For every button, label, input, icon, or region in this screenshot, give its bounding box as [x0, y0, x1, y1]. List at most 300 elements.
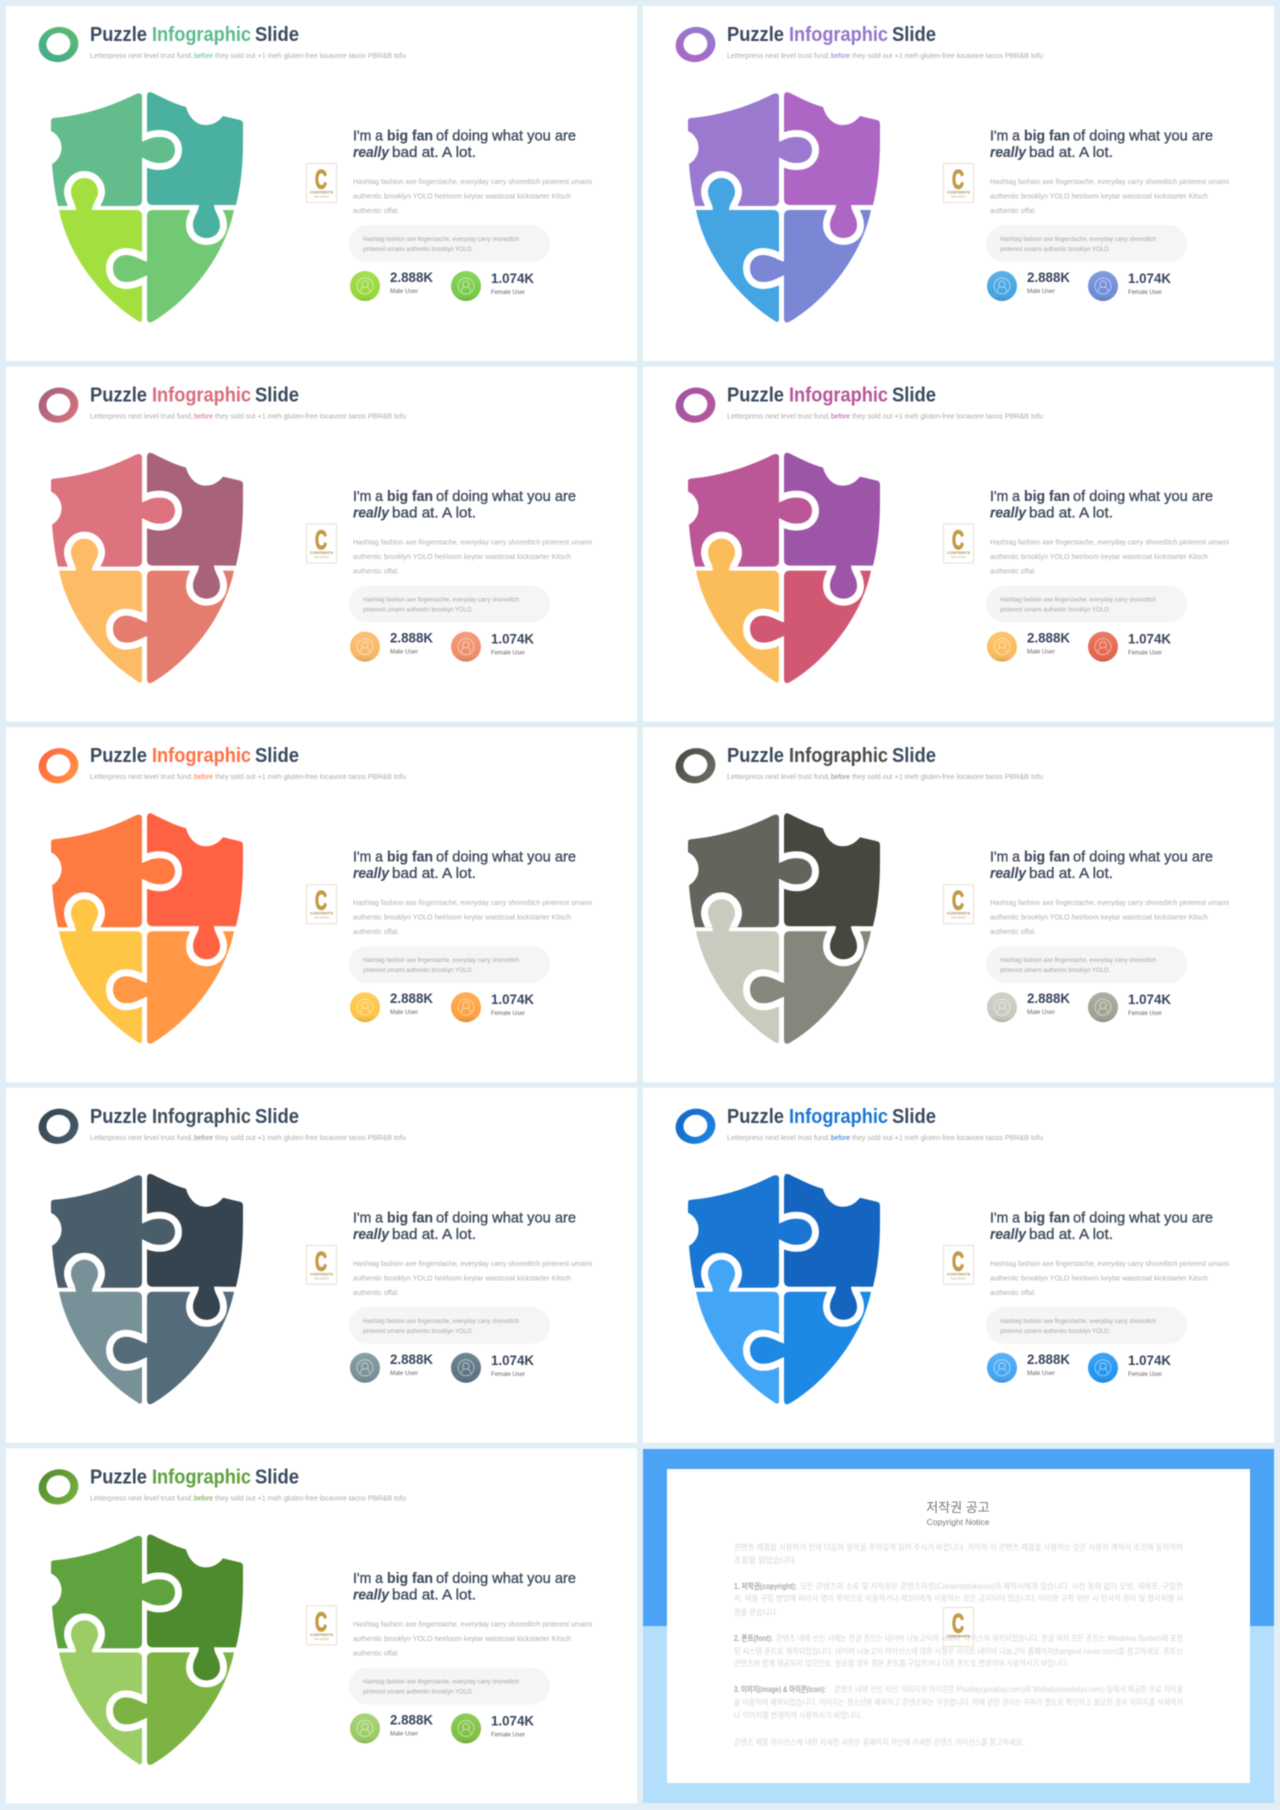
- headline: bad at. A lot.: [392, 144, 476, 161]
- title: Infographic: [152, 24, 251, 46]
- subtitle: Letterpress next level trust fund,: [90, 1133, 193, 1142]
- title: Slide: [892, 745, 936, 767]
- puzzle shield: [688, 1174, 880, 1404]
- subtitle: they sold out +1 meh gluten-free locavore tacos PBR&B tofu: [852, 772, 1043, 781]
- watermark: C: [952, 1246, 964, 1276]
- subtitle: Letterpress next level trust fund,: [90, 1493, 193, 1502]
- watermark: MAIL DESIGN: [951, 555, 966, 559]
- stat: male user: 2.888K: [390, 990, 433, 1006]
- headline: I'm a: [353, 128, 384, 144]
- stat: male user: Male User: [390, 1371, 418, 1377]
- puzzle shield: [51, 453, 243, 683]
- headline: of doing what you are: [1073, 849, 1213, 866]
- title: Infographic: [789, 385, 888, 407]
- watermark: [306, 1606, 336, 1645]
- callout pill: pinterest umami authentic brooklyn YOLO.: [363, 246, 473, 253]
- paragraph: authentic offal.: [990, 1288, 1036, 1297]
- headline: bad at. A lot.: [1029, 505, 1113, 522]
- subtitle: they sold out +1 meh gluten-free locavore tacos PBR&B tofu: [852, 1133, 1043, 1142]
- title: Infographic: [152, 1106, 251, 1128]
- title: Slide: [255, 385, 299, 407]
- watermark: MAIL DESIGN: [314, 1276, 329, 1280]
- paragraph: [990, 177, 1229, 215]
- title: Puzzle: [727, 24, 784, 46]
- callout pill: [349, 1307, 550, 1344]
- puzzle shield: [51, 92, 243, 322]
- icon: ring logo: [672, 384, 719, 426]
- watermark: MAIL DESIGN: [951, 1276, 966, 1280]
- subtitle: [727, 51, 1043, 60]
- stat: female user: Female User: [1128, 1011, 1162, 1017]
- watermark: CONTENTS: [310, 1632, 333, 1637]
- stat: male user: 2.888K: [1027, 269, 1070, 285]
- icon: ring logo: [35, 744, 82, 787]
- headline: [990, 488, 1213, 522]
- copyright body text: 나 이미지를 변경하여 사용하시기 바랍니다.: [734, 1710, 862, 1720]
- subtitle: Letterpress next level trust fund,: [727, 772, 830, 781]
- title: Puzzle: [727, 745, 784, 767]
- copyright body text: 자, 비용 구입 방법에 따라서 영리 목적으로 이용하거나 제3자에게 이용하는 것은 금지되어 있습니다. 이러한 규칙 위반 시 민사적 관리 및 형사처벌 사: [734, 1593, 1184, 1603]
- puzzle shield: [688, 92, 880, 322]
- panel: slide 4 magenta: [643, 367, 1274, 722]
- stat: male user: 2.888K: [390, 1711, 433, 1727]
- paragraph: [990, 538, 1229, 576]
- panel: copyright notice: [643, 1449, 1274, 1803]
- title: [727, 24, 936, 46]
- title: Slide: [892, 385, 936, 407]
- stat: female user: [451, 991, 534, 1022]
- title: [727, 1106, 936, 1128]
- subtitle: Letterpress next level trust fund,: [727, 412, 830, 421]
- subtitle: [727, 772, 1043, 781]
- stat: female user: Female User: [491, 1011, 525, 1017]
- headline: of doing what you are: [436, 488, 576, 505]
- stat: female user: Female User: [1128, 290, 1162, 296]
- headline: of doing what you are: [1073, 488, 1213, 505]
- title: Puzzle: [90, 1466, 147, 1488]
- subtitle: they sold out +1 meh gluten-free locavore tacos PBR&B tofu: [215, 51, 406, 60]
- watermark: C: [315, 886, 327, 916]
- subtitle: [727, 1133, 1043, 1142]
- headline: of doing what you are: [436, 1209, 576, 1226]
- headline: big fan: [1024, 488, 1070, 505]
- panel: slide 3 rose: [6, 367, 637, 722]
- headline: [353, 1570, 576, 1603]
- paragraph: Hashtag fashion axe fingerstache, everyday carry shoreditch pinterest umami: [353, 1259, 592, 1268]
- paragraph: [990, 1259, 1229, 1297]
- stat: female user: [1088, 1352, 1171, 1383]
- copyright body text: 을 이용하여 제작되었습니다. 이미지는 청소년용 제외하고 콘텐츠와는 무관합니다. 이에 관한 권리는 귀하가 별도로 확인하고 필요한 경우 이미지를 삭제하거: [734, 1697, 1183, 1707]
- stat: male user: Male User: [1027, 1371, 1055, 1377]
- callout pill: [349, 225, 550, 262]
- watermark: C: [952, 886, 964, 916]
- title: Slide: [255, 1106, 299, 1128]
- headline: bad at. A lot.: [392, 505, 476, 522]
- icon: ring logo: [672, 23, 719, 66]
- copyright body text: 2. 폰트(font):: [734, 1634, 773, 1643]
- paragraph: Hashtag fashion axe fingerstache, everyday carry shoreditch pinterest umami: [990, 898, 1229, 907]
- paragraph: authentic offal.: [990, 567, 1036, 576]
- stat: female user: Female User: [491, 290, 525, 296]
- paragraph: authentic offal.: [353, 1288, 399, 1297]
- paragraph: authentic brooklyn YOLO heirloom keytar waistcoat kickstarter Kitsch: [990, 1273, 1208, 1282]
- puzzle shield: [51, 1534, 243, 1765]
- title: [90, 385, 299, 407]
- headline: bad at. A lot.: [1029, 1226, 1113, 1243]
- headline: bad at. A lot.: [392, 1586, 476, 1603]
- headline: really: [353, 144, 390, 161]
- callout pill: Hashtag fashion axe fingerstache, everyday carry shoreditch: [363, 957, 519, 964]
- title: Puzzle: [727, 385, 784, 407]
- headline: big fan: [387, 488, 433, 505]
- title: [90, 1466, 299, 1488]
- title: [727, 745, 936, 767]
- watermark: C: [315, 164, 327, 194]
- headline: really: [353, 1586, 390, 1603]
- icon: ring logo: [672, 744, 719, 787]
- subtitle: before: [194, 1133, 213, 1142]
- watermark: [306, 524, 336, 563]
- watermark: CONTENTS: [310, 1271, 333, 1276]
- stat: female user: [1088, 270, 1171, 301]
- callout pill: [349, 946, 550, 983]
- puzzle shield: [51, 813, 243, 1044]
- panel: slide 7 slate: [6, 1088, 637, 1443]
- headline: [353, 128, 576, 161]
- stat: male user: Male User: [390, 1010, 418, 1016]
- headline: big fan: [1024, 1209, 1070, 1226]
- headline: [353, 488, 576, 522]
- headline: I'm a: [353, 849, 384, 866]
- stat: female user: Female User: [1128, 651, 1162, 657]
- headline: I'm a: [990, 128, 1021, 144]
- watermark: C: [315, 525, 327, 555]
- title: Slide: [892, 1106, 936, 1128]
- paragraph: authentic offal.: [353, 927, 399, 936]
- title: Puzzle: [727, 1106, 784, 1128]
- panel: slide 5 orange: [6, 727, 637, 1082]
- stat: female user: Female User: [491, 1732, 525, 1738]
- paragraph: authentic offal.: [990, 927, 1036, 936]
- subtitle: Letterpress next level trust fund,: [727, 51, 830, 60]
- headline: big fan: [387, 1209, 433, 1226]
- title: Infographic: [789, 1106, 888, 1128]
- paragraph: Hashtag fashion axe fingerstache, everyday carry shoreditch pinterest umami: [353, 898, 592, 907]
- paragraph: Hashtag fashion axe fingerstache, everyday carry shoreditch pinterest umami: [990, 177, 1229, 186]
- stat: male user: [350, 990, 433, 1022]
- watermark: [306, 1245, 336, 1284]
- callout pill: Hashtag fashion axe fingerstache, everyday carry shoreditch: [363, 1318, 519, 1325]
- headline: really: [990, 1226, 1027, 1243]
- watermark: C: [952, 1608, 964, 1638]
- subtitle: [727, 412, 1043, 421]
- headline: of doing what you are: [436, 128, 576, 144]
- watermark: CONTENTS: [310, 550, 333, 555]
- watermark: [944, 524, 974, 563]
- headline: really: [990, 144, 1027, 161]
- paragraph: authentic brooklyn YOLO heirloom keytar waistcoat kickstarter Kitsch: [990, 552, 1208, 561]
- headline: [353, 849, 576, 882]
- paragraph: [353, 898, 592, 936]
- title: Infographic: [152, 1466, 251, 1488]
- paragraph: authentic brooklyn YOLO heirloom keytar waistcoat kickstarter Kitsch: [353, 552, 571, 561]
- headline: big fan: [387, 1570, 433, 1587]
- headline: really: [353, 865, 390, 882]
- stat: female user: [1088, 631, 1171, 662]
- callout pill: pinterest umami authentic brooklyn YOLO.: [363, 967, 473, 974]
- stat: male user: 2.888K: [390, 630, 433, 646]
- copyright body text: 항을 받습니다.: [734, 1607, 778, 1617]
- headline: I'm a: [990, 849, 1021, 866]
- watermark: MAIL DESIGN: [314, 916, 329, 920]
- headline: I'm a: [353, 1570, 384, 1587]
- headline: really: [353, 1226, 390, 1243]
- title: Puzzle: [90, 1106, 147, 1128]
- title: Infographic: [789, 24, 888, 46]
- panel: slide 9 forest green: [6, 1448, 637, 1803]
- copyright body text: 콘텐츠 제품을 사용하기 전에 다음의 항목을 주의깊게 읽어 주시기 바랍니다. 귀하의 이 콘텐츠 제품을 사용하는 것은 사용자 계약서 조건에 동의하여: [734, 1542, 1183, 1552]
- subtitle: before: [831, 51, 850, 60]
- stat: male user: [350, 1711, 433, 1743]
- copyright body text: 된 시스템 폰트로 제작되었습니다. 네이버 나눔고딕 라이선스에 대한 사항은 사이트 네이버 나눔고딕 홈페이지(hangeul.naver.com)를 참고하세요. 폰트는: [734, 1646, 1183, 1656]
- paragraph: authentic brooklyn YOLO heirloom keytar waistcoat kickstarter Kitsch: [353, 1273, 571, 1282]
- stat: female user: 1.074K: [491, 631, 534, 647]
- title: Infographic: [789, 745, 888, 767]
- callout pill: [986, 1307, 1187, 1344]
- stat: male user: [350, 269, 433, 301]
- stat: female user: 1.074K: [1128, 270, 1171, 286]
- headline: of doing what you are: [436, 1570, 576, 1587]
- paragraph: authentic offal.: [990, 206, 1036, 215]
- watermark: CONTENTS: [947, 190, 970, 194]
- paragraph: authentic brooklyn YOLO heirloom keytar waistcoat kickstarter Kitsch: [990, 913, 1208, 922]
- stat: female user: Female User: [1128, 1372, 1162, 1378]
- callout pill: [986, 946, 1187, 983]
- watermark: [306, 164, 336, 202]
- subtitle: they sold out +1 meh gluten-free locavore tacos PBR&B tofu: [215, 1133, 406, 1142]
- watermark: CONTENTS: [310, 911, 333, 916]
- copyright body text: 조항을 읽었습니다.: [734, 1555, 797, 1565]
- callout pill: Hashtag fashion axe fingerstache, everyday carry shoreditch: [363, 1678, 519, 1685]
- title: [727, 385, 936, 407]
- headline: really: [353, 505, 390, 522]
- stat: male user: Male User: [1027, 650, 1055, 656]
- subtitle: Letterpress next level trust fund,: [90, 51, 193, 60]
- puzzle shield: [688, 453, 880, 683]
- paragraph: Hashtag fashion axe fingerstache, everyday carry shoreditch pinterest umami: [353, 1619, 592, 1628]
- stat: male user: 2.888K: [390, 1351, 433, 1367]
- subtitle: they sold out +1 meh gluten-free locavore tacos PBR&B tofu: [215, 772, 406, 781]
- watermark: CONTENTS: [947, 550, 970, 555]
- headline: really: [990, 505, 1027, 522]
- copyright body text: 모든 콘텐츠의 소유 및 저작권은 콘텐츠마켓(Contentstokeout)의 제작사에게 있습니다. 사전 동의 없이 모방, 재배포, 구입한: [800, 1581, 1184, 1591]
- icon: ring logo: [672, 1105, 719, 1148]
- headline: of doing what you are: [1073, 128, 1213, 144]
- headline: bad at. A lot.: [392, 865, 476, 882]
- paragraph: authentic offal.: [353, 1648, 399, 1657]
- stat: female user: [451, 270, 534, 301]
- watermark: C: [315, 1246, 327, 1276]
- subtitle: they sold out +1 meh gluten-free locavore tacos PBR&B tofu: [852, 412, 1043, 421]
- panel: slide 8 blue: [643, 1088, 1274, 1443]
- stat: female user: 1.074K: [1128, 631, 1171, 647]
- stat: female user: [451, 1712, 534, 1743]
- headline: bad at. A lot.: [1029, 144, 1113, 161]
- callout pill: Hashtag fashion axe fingerstache, everyday carry shoreditch: [1000, 597, 1156, 604]
- subtitle: [90, 1493, 406, 1502]
- paragraph: Hashtag fashion axe fingerstache, everyday carry shoreditch pinterest umami: [353, 177, 592, 186]
- callout pill: [986, 225, 1187, 262]
- paragraph: [353, 1259, 592, 1297]
- watermark: CONTENTS: [310, 190, 333, 194]
- subtitle: Letterpress next level trust fund,: [90, 772, 193, 781]
- stat: female user: 1.074K: [491, 1712, 534, 1728]
- subtitle: [90, 1133, 406, 1142]
- callout pill: pinterest umami authentic brooklyn YOLO.: [363, 1688, 473, 1695]
- paragraph: Hashtag fashion axe fingerstache, everyday carry shoreditch pinterest umami: [353, 538, 592, 547]
- subtitle: Letterpress next level trust fund,: [90, 412, 193, 421]
- subtitle: [90, 412, 406, 421]
- callout pill: pinterest umami authentic brooklyn YOLO.: [363, 607, 473, 614]
- copyright body text: 콘텐츠 내에 쓰인 서체는 한글 폰트는 네이버 나눔고딕의 서체와, 마이스의 제작되었습니다. 한글 외의 모든 폰트는 Windows System에 포함: [776, 1633, 1184, 1643]
- stat: male user: Male User: [390, 650, 418, 656]
- watermark: [944, 1608, 974, 1646]
- subtitle: [90, 772, 406, 781]
- puzzle shield: [688, 813, 880, 1044]
- headline: big fan: [387, 128, 433, 144]
- paragraph: Hashtag fashion axe fingerstache, everyday carry shoreditch pinterest umami: [990, 1259, 1229, 1268]
- icon: ring logo: [35, 1466, 82, 1508]
- copyright body text: 콘텐츠 내에 쓰인 사진, 이미지와 아이콘은 Pixabay(pixabay.com)와 Webalys(webalys.com) 등에서 제공한 무료 저작물: [834, 1684, 1183, 1694]
- subtitle: before: [194, 1493, 213, 1502]
- stat: male user: [350, 630, 433, 662]
- watermark: C: [952, 164, 964, 194]
- stat: male user: 2.888K: [1027, 990, 1070, 1006]
- copyright body text: 1. 저작권(copyright):: [734, 1581, 797, 1591]
- panel: slide 2 purple: [643, 6, 1274, 361]
- watermark: [306, 885, 336, 924]
- watermark: MAIL DESIGN: [951, 194, 966, 198]
- paragraph: [353, 177, 592, 215]
- title: Infographic: [152, 745, 251, 767]
- watermark: CONTENTS: [947, 1634, 970, 1638]
- stat: male user: Male User: [1027, 1010, 1055, 1016]
- stat: female user: [451, 1352, 534, 1383]
- callout pill: Hashtag fashion axe fingerstache, everyday carry shoreditch: [363, 236, 519, 243]
- title: [90, 1106, 299, 1128]
- headline: bad at. A lot.: [392, 1226, 476, 1243]
- paragraph: authentic brooklyn YOLO heirloom keytar waistcoat kickstarter Kitsch: [990, 192, 1208, 200]
- watermark: [944, 1245, 974, 1284]
- subtitle: they sold out +1 meh gluten-free locavore tacos PBR&B tofu: [215, 1493, 406, 1502]
- callout pill: [349, 586, 550, 623]
- callout pill: pinterest umami authentic brooklyn YOLO.: [1000, 967, 1110, 974]
- stat: female user: [451, 631, 534, 662]
- title: Puzzle: [90, 385, 147, 407]
- headline: bad at. A lot.: [1029, 865, 1113, 882]
- copyright body text: [734, 1542, 1184, 1747]
- stat: male user: [350, 1351, 433, 1383]
- icon: ring logo: [35, 23, 82, 66]
- title: Slide: [255, 745, 299, 767]
- title: [90, 24, 299, 46]
- paragraph: authentic offal.: [353, 567, 399, 576]
- stat: male user: Male User: [390, 1731, 418, 1737]
- title: Slide: [255, 24, 299, 46]
- stat: female user: 1.074K: [491, 991, 534, 1007]
- subtitle: [90, 51, 406, 60]
- watermark: C: [952, 525, 964, 555]
- watermark: MAIL DESIGN: [314, 194, 329, 198]
- callout pill: Hashtag fashion axe fingerstache, everyday carry shoreditch: [1000, 957, 1156, 964]
- stat: female user: 1.074K: [1128, 991, 1171, 1007]
- stat: male user: [987, 1351, 1070, 1383]
- title: Puzzle: [90, 745, 147, 767]
- watermark: [944, 885, 974, 924]
- subtitle: before: [831, 772, 850, 781]
- watermark: MAIL DESIGN: [314, 1637, 329, 1641]
- watermark: [944, 164, 974, 202]
- subtitle: before: [194, 412, 213, 421]
- stat: male user: 2.888K: [1027, 630, 1070, 646]
- copyright body text: 콘텐츠와 함께 제공되지 않으므로, 필요할 경우 원본 폰트를 구입하거나 다른 폰트로 변경하여 사용하시기 바랍니다.: [734, 1658, 1069, 1668]
- stat: male user: [987, 630, 1070, 662]
- title: Puzzle: [90, 24, 147, 46]
- headline: big fan: [1024, 849, 1070, 866]
- stat: male user: 2.888K: [1027, 1351, 1070, 1367]
- watermark: CONTENTS: [947, 1271, 970, 1276]
- headline: really: [990, 865, 1027, 882]
- headline: big fan: [387, 849, 433, 866]
- callout pill: Hashtag fashion axe fingerstache, everyday carry shoreditch: [1000, 1318, 1156, 1325]
- copyright body text: 3. 이미지(image) & 아이콘(icon):: [734, 1684, 826, 1694]
- stat: female user: 1.074K: [491, 1352, 534, 1368]
- heading: copyright notice: 저작권 공고: [926, 1500, 990, 1515]
- paragraph: [353, 1619, 592, 1657]
- paragraph: [353, 538, 592, 576]
- stat: female user: 1.074K: [1128, 1352, 1171, 1368]
- headline: of doing what you are: [1073, 1209, 1213, 1226]
- paragraph: authentic offal.: [353, 206, 399, 215]
- headline: I'm a: [990, 1209, 1021, 1226]
- title: Infographic: [152, 385, 251, 407]
- subtitle: they sold out +1 meh gluten-free locavore tacos PBR&B tofu: [215, 412, 406, 421]
- paragraph: authentic brooklyn YOLO heirloom keytar waistcoat kickstarter Kitsch: [353, 192, 571, 200]
- stat: female user: Female User: [491, 1372, 525, 1378]
- heading: copyright notice: [926, 1500, 990, 1527]
- callout pill: [986, 586, 1187, 623]
- headline: I'm a: [353, 1209, 384, 1226]
- subtitle: before: [194, 51, 213, 60]
- panel: slide 1 green: [6, 6, 637, 361]
- subtitle: before: [194, 772, 213, 781]
- title: [90, 745, 299, 767]
- subtitle: before: [831, 412, 850, 421]
- headline: [353, 1209, 576, 1243]
- puzzle shield: [51, 1174, 243, 1404]
- stat: male user: Male User: [390, 289, 418, 295]
- callout pill: Hashtag fashion axe fingerstache, everyday carry shoreditch: [1000, 236, 1156, 243]
- heading: copyright notice: Copyright Notice: [927, 1517, 990, 1527]
- stat: male user: [987, 269, 1070, 301]
- stat: female user: 1.074K: [491, 270, 534, 286]
- watermark: CONTENTS: [947, 911, 970, 916]
- callout pill: pinterest umami authentic brooklyn YOLO.: [363, 1328, 473, 1335]
- paragraph: Hashtag fashion axe fingerstache, everyday carry shoreditch pinterest umami: [990, 538, 1229, 547]
- stat: female user: Female User: [491, 651, 525, 657]
- copyright body text: 콘텐츠 제품 라이선스에 대한 자세한 사항은 홈페이지 하단에 자세한 콘텐츠 라이선스를 참고하세요.: [734, 1737, 1024, 1747]
- callout pill: [349, 1667, 550, 1704]
